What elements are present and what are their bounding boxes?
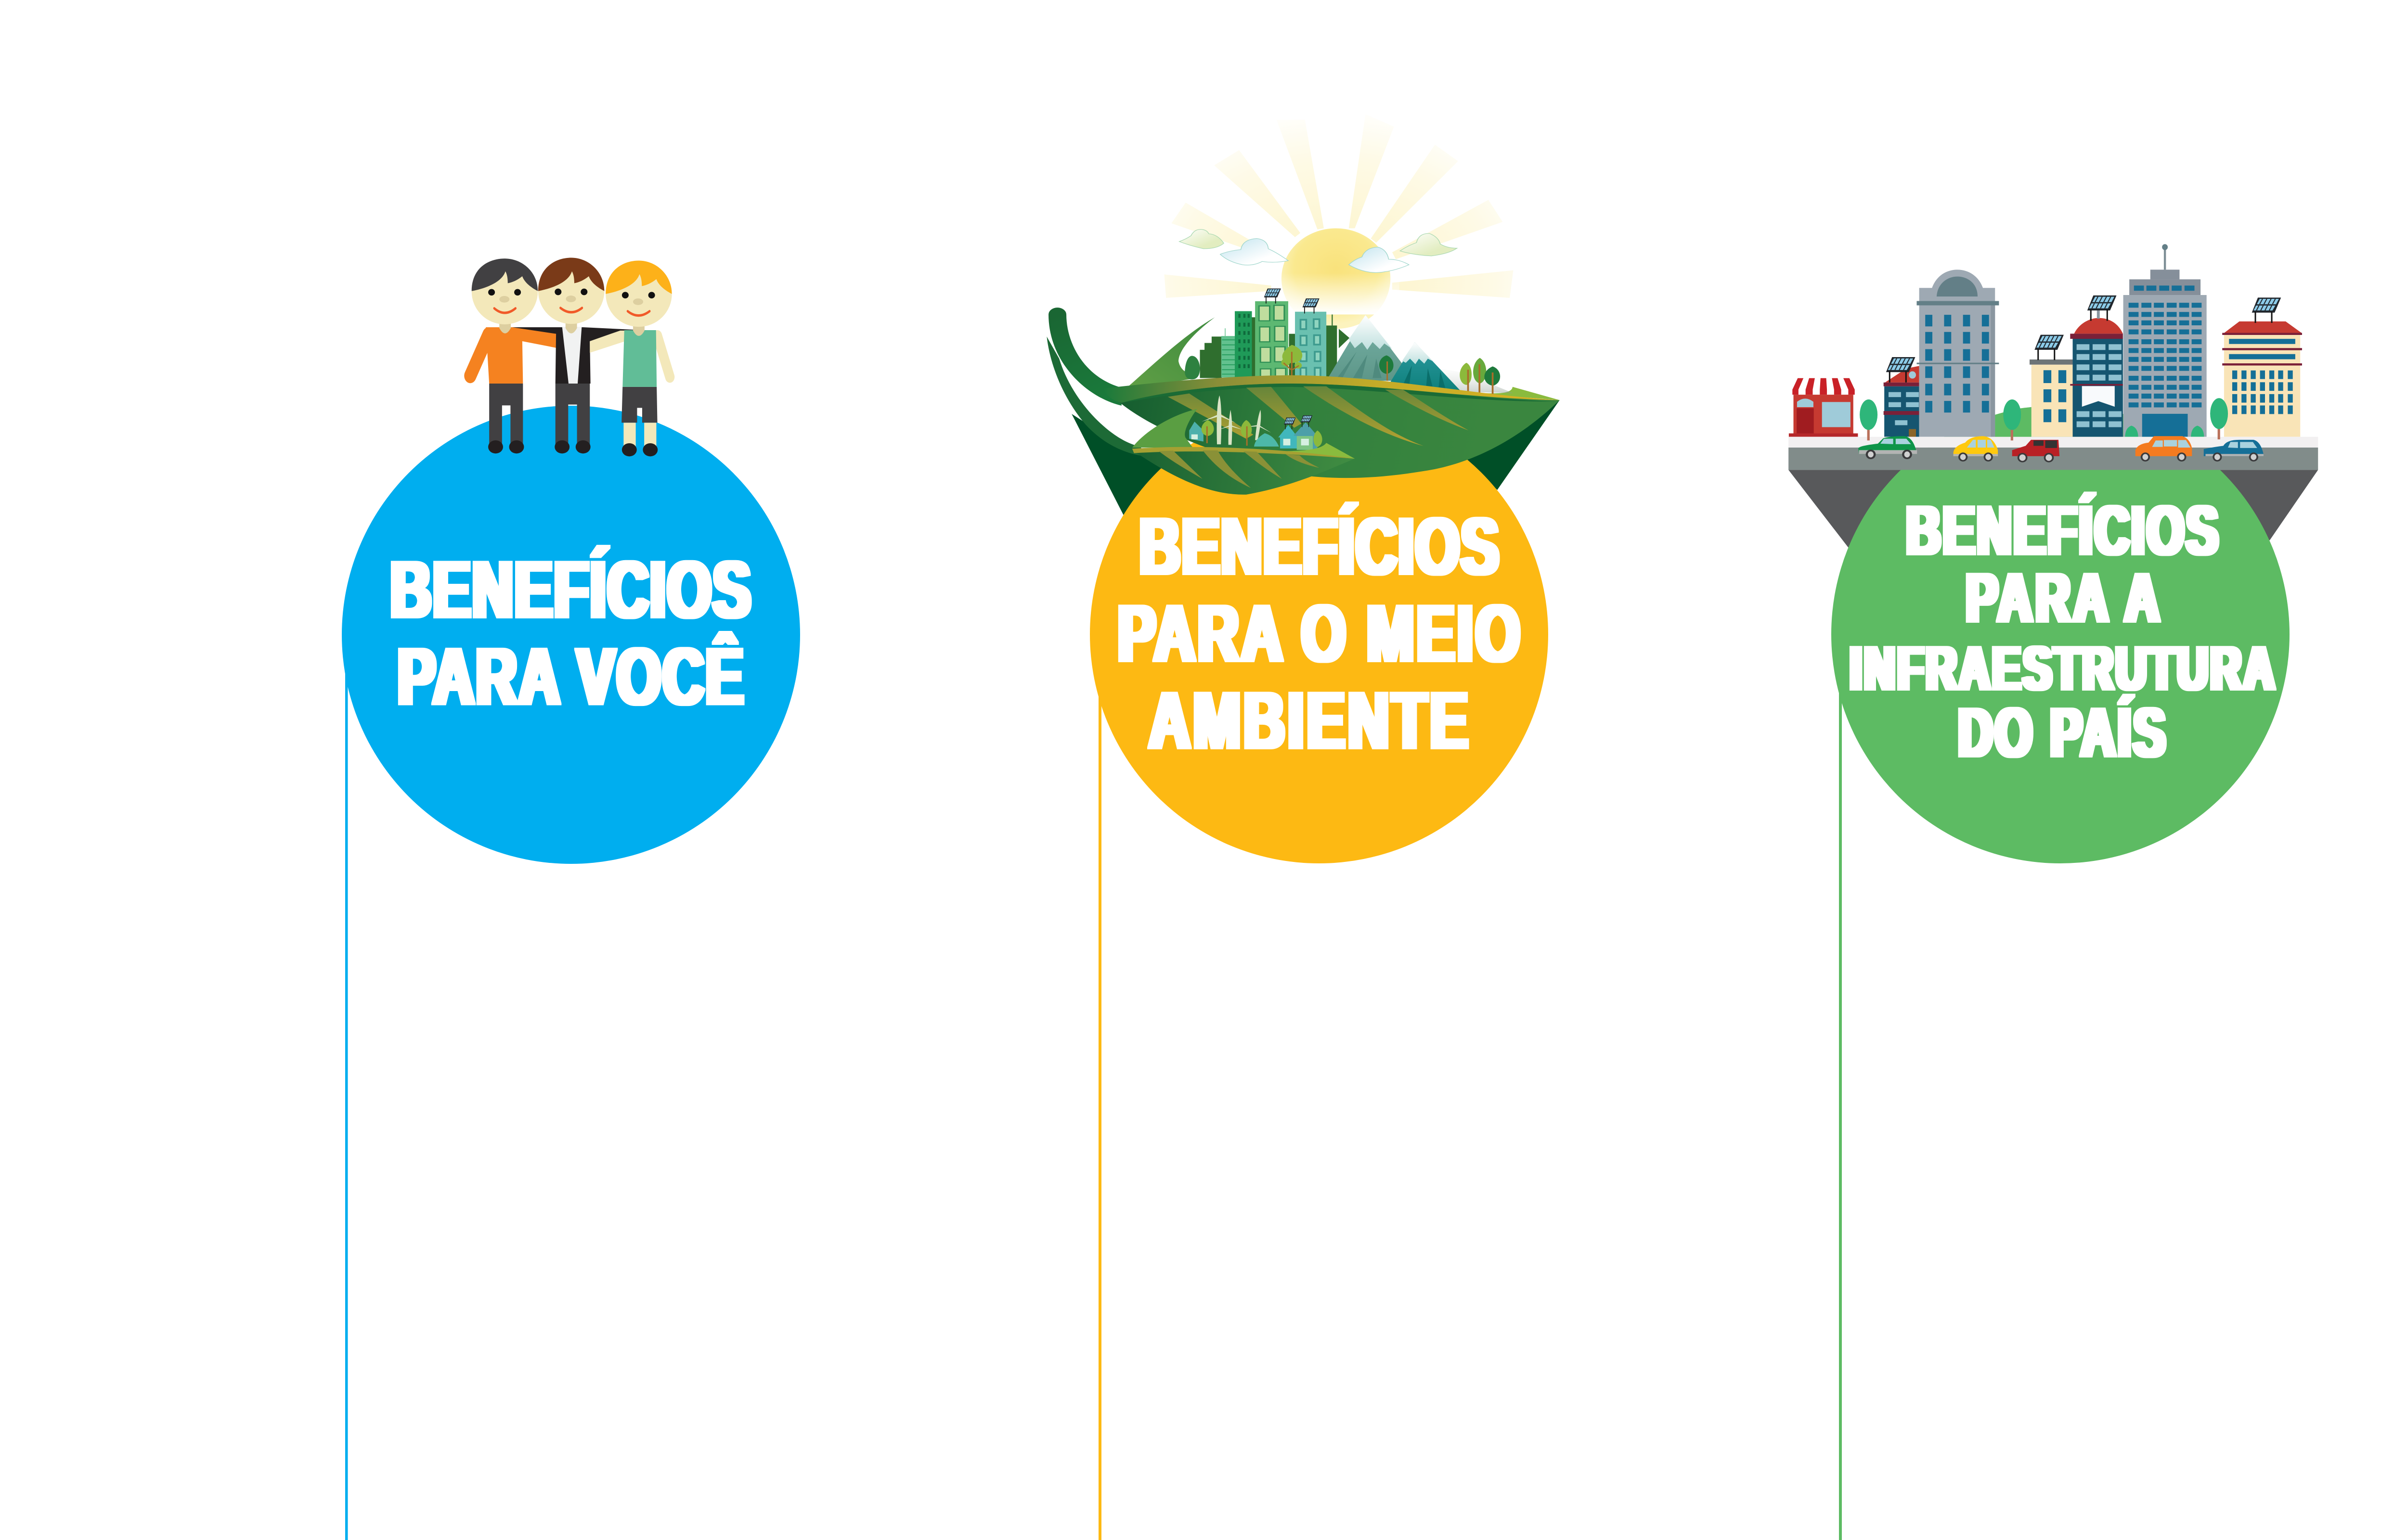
cream building xyxy=(2030,335,2073,437)
main stem xyxy=(1048,308,1122,406)
circle: green badge xyxy=(1831,405,2290,863)
icon: three friends xyxy=(470,258,672,456)
leaf veins xyxy=(1168,386,1469,446)
road underside wedges xyxy=(1788,470,2318,549)
heading: benefícios para a infraestrutura do país: DO PAÍS xyxy=(1958,694,2165,772)
heading: benefícios para a infraestrutura do país: PARA A xyxy=(1966,559,2159,637)
car: blue xyxy=(2204,440,2264,462)
gold midrib xyxy=(1104,375,1560,403)
car: green xyxy=(1858,436,1917,459)
navy small building xyxy=(1884,357,1919,437)
small leaf veins xyxy=(1159,450,1319,488)
car: red xyxy=(2012,440,2059,462)
vertical line: amber xyxy=(1099,626,1101,1540)
shop xyxy=(1789,378,1858,437)
leaf upper flap left xyxy=(1127,317,1215,389)
small leaf right flap xyxy=(1275,443,1355,459)
leaf upper flap right xyxy=(1453,387,1560,400)
small leaf midrib xyxy=(1132,447,1355,459)
vertical line: green xyxy=(1839,626,1842,1540)
tall office tower xyxy=(2123,244,2207,437)
grey tower with dome xyxy=(1916,270,1999,437)
heading: benefícios para o meio ambiente: PARA O MEIO xyxy=(1118,588,1520,679)
panel: benefícios para você xyxy=(342,258,800,1540)
sun rays xyxy=(1165,114,1514,298)
heading: benefícios para a infraestrutura do país: BENEFÍCIOS xyxy=(1906,492,2218,570)
mountains xyxy=(1326,315,1514,393)
circle: amber badge xyxy=(1090,405,1548,863)
small leaf upper flap xyxy=(1132,409,1197,448)
person: left boy, orange shirt xyxy=(470,258,556,453)
icon: leaf eco city with sun xyxy=(1047,114,1560,495)
back stem xyxy=(1047,336,1139,455)
leaf shadow triangles xyxy=(1072,400,1560,522)
icon: city street xyxy=(1788,244,2318,470)
street trees xyxy=(1860,398,2228,440)
trees on hill xyxy=(1185,345,1500,396)
heading: benefícios para o meio ambiente: BENEFÍCIOS xyxy=(1139,501,1499,591)
small leaf scene xyxy=(1189,396,1322,450)
road xyxy=(1788,448,2318,470)
small leaf stem xyxy=(1132,445,1148,457)
heading: benefícios para o meio ambiente xyxy=(1118,501,1520,766)
skyline xyxy=(1200,289,1349,378)
small leaf body xyxy=(1134,449,1355,495)
heading: benefícios para você: BENEFÍCIOS xyxy=(390,544,751,635)
car: orange xyxy=(2135,436,2192,462)
panel: benefícios para o meio ambiente xyxy=(1047,114,1560,1540)
sidewalk xyxy=(1788,437,2318,448)
vertical line: blue xyxy=(345,626,348,1540)
person: middle boy, black jacket xyxy=(512,258,634,453)
panel: benefícios para a infraestrutura do país xyxy=(1788,244,2318,1540)
heading: benefícios para a infraestrutura do país: INFRAESTRUTURA xyxy=(1850,634,2274,703)
person: right boy, teal tank top xyxy=(606,261,672,456)
car: yellow xyxy=(1954,436,1998,462)
sun xyxy=(1275,228,1399,329)
heading: benefícios para a infraestrutura do país xyxy=(1850,492,2274,772)
hill xyxy=(1994,407,2033,437)
navy domed building xyxy=(2070,295,2123,437)
clouds xyxy=(1179,230,1457,272)
main leaf body xyxy=(1111,381,1560,478)
circle: blue badge xyxy=(342,406,800,864)
heading: benefícios para você: PARA VOCÊ xyxy=(398,631,743,721)
hotel building xyxy=(2222,297,2302,437)
heading: benefícios para o meio ambiente: AMBIENTE xyxy=(1149,675,1468,766)
heading: benefícios para você xyxy=(390,544,751,721)
